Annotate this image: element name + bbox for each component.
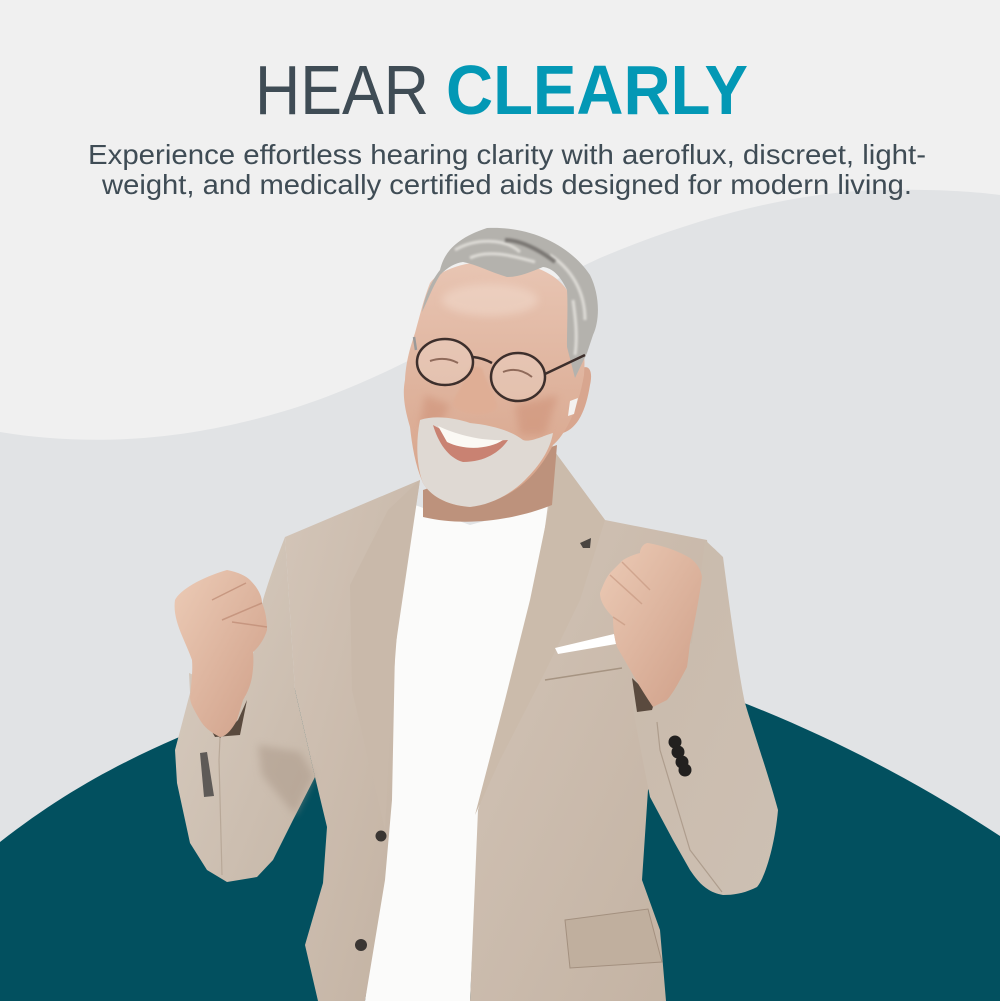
head	[404, 261, 584, 507]
title: HEAR	[255, 51, 429, 129]
beard	[417, 417, 553, 507]
jacket buttons	[355, 830, 386, 951]
subtitle: Experience effortless hearing clarity with aeroflux, discreet, light-	[88, 139, 926, 170]
left cuff opening shadow	[190, 693, 247, 738]
title: CLEARLY	[446, 51, 748, 129]
left fist	[175, 570, 267, 737]
teal arc	[0, 649, 1000, 1001]
jacket: right side of body	[470, 452, 722, 1001]
left lapel	[350, 480, 420, 830]
subtitle: weight, and medically certified aids designed for modern living.	[101, 169, 912, 200]
ear	[553, 367, 591, 433]
man photo illustration	[175, 228, 778, 1001]
right fist	[600, 543, 702, 707]
mouth	[433, 425, 508, 462]
jacket: left side of body	[285, 480, 420, 1001]
right cuff buttons	[668, 736, 692, 776]
subtitle	[88, 139, 926, 200]
glasses	[414, 337, 585, 401]
right cuff opening shadow	[632, 678, 655, 712]
neck	[423, 445, 557, 522]
left cuff buttons	[200, 752, 214, 797]
right lapel	[475, 452, 605, 815]
left arm fold shading	[258, 745, 314, 815]
lapel pin	[580, 538, 591, 548]
nose	[453, 366, 497, 414]
title	[255, 51, 748, 129]
forehead highlight	[442, 284, 538, 316]
right cuff seam	[657, 722, 722, 892]
lower pocket flap	[565, 909, 662, 968]
left cuff seam	[219, 738, 222, 875]
pocket square	[555, 634, 616, 654]
left sleeve	[175, 537, 315, 882]
right sleeve	[632, 540, 778, 895]
chest pocket welt	[545, 668, 622, 680]
hearing aid	[568, 398, 578, 416]
white t-shirt	[365, 503, 550, 1001]
cheek shading	[420, 395, 558, 435]
hair	[422, 228, 598, 378]
